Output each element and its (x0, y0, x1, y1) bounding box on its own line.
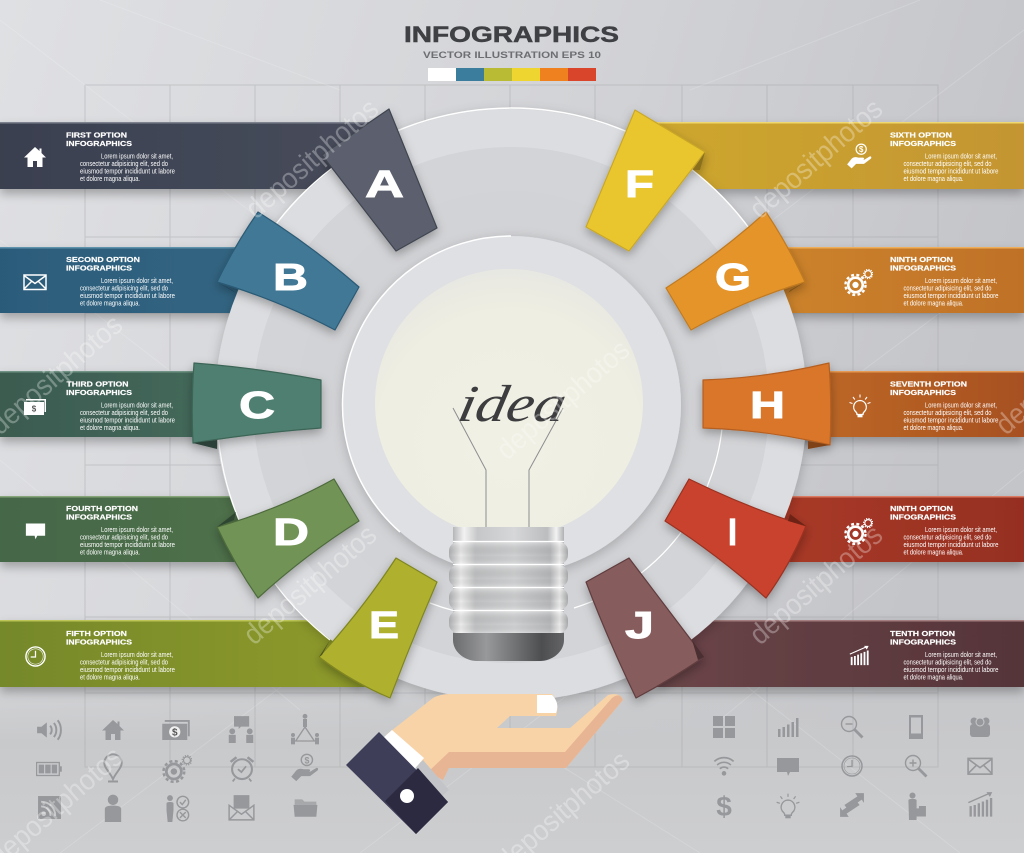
icon: gears (845, 269, 873, 295)
text: tenth option: Lorem ipsum dolor sit amet, (925, 650, 997, 659)
text: seventh option: et dolore magna aliqua. (904, 423, 964, 432)
text: ninth option (I): INFOGRAPHICS (890, 512, 956, 522)
letter C: C (239, 385, 275, 427)
icon: network (291, 714, 319, 744)
sleeve (346, 732, 448, 834)
icon: rss (38, 796, 61, 819)
text: second option: Lorem ipsum dolor sit amet, (101, 276, 173, 285)
icon: gears (845, 518, 873, 544)
ring (215, 108, 807, 701)
text: seventh option (890, 380, 998, 432)
icon: light bulb (850, 394, 870, 417)
text: first option: FIRST OPTION (66, 130, 127, 140)
text: third option: Lorem ipsum dolor sit amet, (101, 400, 173, 410)
tab I (665, 479, 806, 598)
letter E: E (369, 605, 399, 647)
text: second option: SECOND OPTION (66, 255, 140, 264)
tab J (586, 558, 704, 698)
title (404, 22, 619, 61)
text: tenth option: eiusmod tempor incididunt ut labore (904, 665, 998, 674)
icon: speaker (37, 720, 61, 740)
icon: clock (842, 756, 862, 776)
icon: house (102, 720, 124, 740)
watermarks: depositphotos (240, 93, 385, 225)
icon: calculator (713, 716, 735, 738)
letter A: A (365, 164, 404, 206)
letter F: F (625, 164, 654, 206)
icon: arrows (840, 793, 864, 817)
letter H: H (750, 385, 785, 427)
text: ninth option (I): et dolore magna aliqua. (904, 548, 964, 556)
text: first option: INFOGRAPHICS (66, 139, 132, 148)
icon: dollar (716, 791, 732, 822)
light bulb (375, 269, 643, 661)
tab A (322, 109, 437, 251)
hand (346, 694, 623, 834)
plate (342, 236, 681, 574)
text: ninth option (G) (890, 255, 998, 308)
text: tenth option (890, 629, 998, 682)
text: fourth option: eiusmod tempor incididunt ut labore (80, 540, 175, 549)
button (400, 789, 414, 803)
text: ninth option (I): Lorem ipsum dolor sit amet, (925, 525, 997, 534)
bottom-right icon set (713, 715, 992, 822)
text: ninth option (I): eiusmod tempor incididunt ut labore (904, 540, 998, 549)
text: sixth option: et dolore magna aliqua. (904, 174, 964, 183)
icon: smartphone (909, 715, 923, 739)
icon: open mail (229, 795, 254, 820)
ribbon D background (0, 496, 260, 562)
fingernail (537, 695, 557, 713)
text: seventh option: consectetur adipisicing elit, sed do (904, 408, 992, 417)
text: tenth option: consectetur adipisicing elit, sed do (904, 658, 992, 666)
text: sixth option: Lorem ipsum dolor sit amet, (925, 152, 997, 160)
tab D (217, 479, 359, 598)
palm (386, 694, 623, 778)
text: first option: consectetur adipisicing elit, sed do (80, 159, 168, 168)
text: third option: consectetur adipisicing elit, sed do (80, 408, 168, 417)
ribbon A background (0, 122, 370, 189)
icon: meeting (229, 716, 253, 743)
tab G (666, 212, 805, 330)
icon: wifi (714, 758, 734, 776)
text: ninth option (G): eiusmod tempor incididunt ut labore (904, 291, 998, 300)
letter G: G (715, 257, 751, 299)
ribbon E background (0, 620, 365, 687)
text: ninth option (G): Lorem ipsum dolor sit amet, (925, 276, 997, 285)
text: fourth option: Lorem ipsum dolor sit amet, (101, 525, 173, 534)
text: fifth option: et dolore magna aliqua. (80, 672, 140, 682)
icon: hand with coin (291, 754, 318, 781)
text: ninth option (I): consectetur adipisicing elit, sed do (904, 532, 992, 542)
text: ninth option (G): NINTH OPTION (890, 255, 953, 264)
shirt cuff (383, 730, 424, 772)
ribbon G background (765, 247, 1024, 313)
letter B: B (273, 257, 308, 299)
letter J: J (625, 605, 654, 647)
text: ninth option (I): NINTH OPTION (890, 504, 953, 513)
icon: people (970, 718, 990, 737)
title: INFOGRAPHICS (404, 22, 619, 47)
text: fourth option (66, 504, 175, 556)
icon: money (24, 399, 46, 415)
text: fifth option (66, 629, 175, 682)
bulb screw base (449, 527, 568, 661)
text: second option (66, 255, 175, 308)
text: second option: INFOGRAPHICS (66, 264, 132, 272)
icon: signal bars (778, 718, 798, 737)
icon: alarm clock (230, 756, 254, 781)
ribbon I background (765, 496, 1024, 562)
text: sixth option: INFOGRAPHICS (890, 139, 956, 148)
text: first option (66, 130, 175, 183)
palm shade (428, 695, 623, 780)
watermarks: depositphotos (238, 519, 383, 651)
icon: location pin (104, 754, 122, 782)
icon: house (24, 147, 46, 167)
text: second option: eiusmod tempor incididunt ut labore (80, 291, 175, 300)
text: seventh option: eiusmod tempor incididunt ut labore (904, 416, 998, 424)
letter D: D (273, 512, 309, 554)
icon: folder (294, 799, 317, 817)
text: seventh option: SEVENTH OPTION (890, 380, 967, 388)
text: second option: consectetur adipisicing elit, sed do (80, 284, 168, 292)
text: fifth option: Lorem ipsum dolor sit amet, (101, 650, 173, 659)
colour bar (428, 68, 596, 81)
text: third option: eiusmod tempor incididunt ut labore (80, 416, 175, 424)
text: third option: INFOGRAPHICS (66, 388, 132, 397)
watermarks: depositphotos (744, 519, 889, 651)
icon: speech bubble (26, 524, 45, 539)
text: fourth option: FOURTH OPTION (66, 504, 138, 513)
text: fourth option: et dolore magna aliqua. (80, 548, 140, 556)
icon: mail (24, 275, 46, 290)
text: sixth option (890, 130, 998, 183)
tab C (192, 363, 321, 449)
text: tenth option: INFOGRAPHICS (890, 638, 956, 646)
text: third option: THIRD OPTION (66, 380, 128, 388)
text: fourth option: INFOGRAPHICS (66, 512, 132, 522)
ribbon H background (800, 371, 1024, 437)
text: seventh option: Lorem ipsum dolor sit amet, (925, 400, 997, 410)
icon: growth chart (968, 792, 992, 817)
bottom-left icon set (37, 714, 319, 822)
watermarks: depositphotos (491, 334, 636, 466)
ribbon B background (0, 247, 260, 313)
text: ninth option (I) (890, 504, 998, 556)
icon: zoom in (906, 756, 926, 776)
text: sixth option: eiusmod tempor incididunt ut labore (904, 166, 998, 176)
icon: approve reject (166, 795, 189, 822)
icon: battery (37, 762, 62, 776)
text: tenth option: TENTH OPTION (890, 629, 955, 638)
icon: speech bubble (777, 758, 799, 776)
text: sixth option: SIXTH OPTION (890, 130, 952, 140)
text: fifth option: INFOGRAPHICS (66, 638, 132, 646)
text: fourth option: consectetur adipisicing elit, sed do (80, 532, 168, 542)
tab H (703, 363, 831, 449)
icon: growth chart (850, 646, 869, 665)
text: third option: et dolore magna aliqua. (80, 423, 140, 432)
icon: zoom out (842, 716, 862, 738)
icon: hand with coin (847, 144, 871, 168)
text: fifth option: eiusmod tempor incididunt ut labore (80, 665, 175, 674)
text: first option: eiusmod tempor incididunt ut labore (80, 166, 175, 176)
ribbon C background (0, 371, 230, 437)
text: sixth option: consectetur adipisicing elit, sed do (904, 159, 992, 168)
text: third option (66, 380, 175, 432)
ribbon F background (650, 122, 1024, 189)
text: first option: et dolore magna aliqua. (80, 174, 140, 183)
icon: money (162, 720, 190, 740)
text: fifth option: consectetur adipisicing elit, sed do (80, 658, 168, 666)
text: seventh option: INFOGRAPHICS (890, 388, 956, 397)
icon: businessman (105, 795, 121, 822)
watermarks: depositphotos (744, 93, 889, 225)
text: second option: et dolore magna aliqua. (80, 298, 140, 308)
filament (453, 408, 563, 527)
icon: gears (164, 756, 192, 782)
tab F (586, 110, 705, 251)
tab E (319, 558, 437, 698)
icon: light bulb (777, 794, 799, 818)
letter I: I (728, 512, 737, 554)
text: ninth option (G): consectetur adipisicing elit, sed do (904, 284, 992, 292)
bulb glass (375, 269, 643, 537)
text: first option: Lorem ipsum dolor sit amet, (101, 152, 173, 160)
text: ninth option (G): INFOGRAPHICS (890, 264, 956, 272)
text: ninth option (G): et dolore magna aliqua. (904, 298, 964, 308)
text: fifth option: FIFTH OPTION (66, 629, 127, 638)
icon: clock (26, 647, 45, 666)
ribbon J background (655, 620, 1024, 687)
icon: businessman with case (908, 792, 926, 820)
idea word: idea (453, 376, 572, 433)
icon: mail (968, 758, 992, 774)
tab B (217, 212, 359, 330)
text: tenth option: et dolore magna aliqua. (904, 672, 964, 682)
subtitle: VECTOR ILLUSTRATION EPS 10 (423, 50, 601, 61)
